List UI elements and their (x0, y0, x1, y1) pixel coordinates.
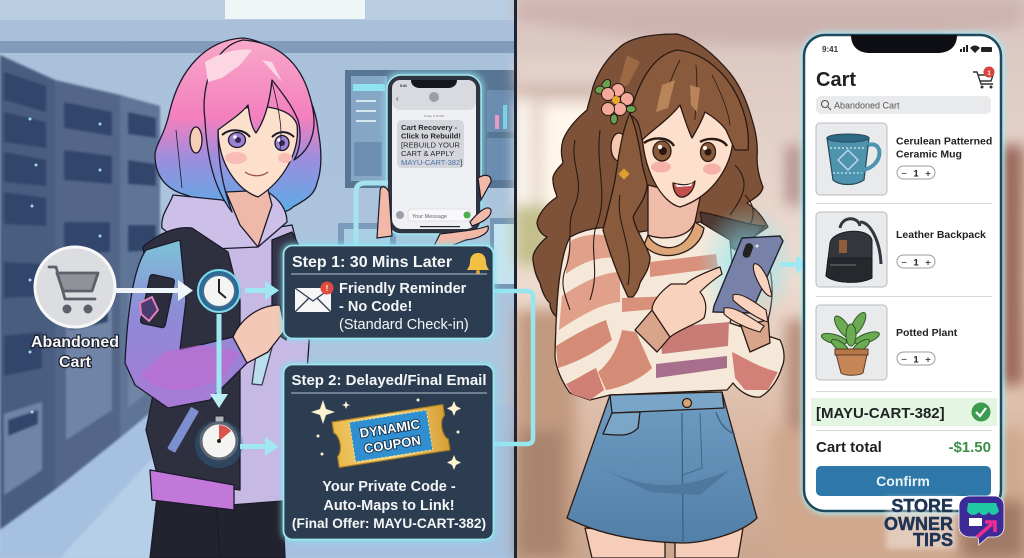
jacket hem (150, 470, 234, 510)
mug label: Ceramic Mug (896, 148, 962, 160)
icon: envelope: ! (326, 284, 328, 293)
right hand (738, 262, 772, 326)
icon: earring (618, 168, 630, 180)
left hand (652, 267, 722, 337)
neck (226, 190, 272, 247)
sparkles (311, 398, 461, 470)
jacket (143, 228, 240, 490)
face (218, 107, 297, 197)
item: backpack (816, 212, 986, 287)
front curl (603, 113, 650, 297)
character: pink-haired girl (125, 38, 321, 558)
item: mug: + (925, 168, 931, 180)
icon: hair flower (595, 78, 636, 124)
search bar (816, 96, 991, 114)
connector: arrow to cart phone (780, 255, 808, 274)
right cuff (740, 317, 770, 352)
item: plant: − (901, 354, 907, 366)
cart total row: Cart total (816, 439, 882, 456)
floor (0, 405, 516, 558)
confirm button (816, 466, 991, 496)
title: Cart (816, 69, 856, 91)
skirt (567, 392, 757, 543)
phone held by pink-haired girl: Today 3:12 PM (424, 114, 445, 118)
item: mug (816, 123, 992, 195)
sms bubble (397, 120, 464, 168)
logo: store owner tips: TIPS (913, 530, 953, 550)
racks (0, 55, 55, 530)
logo icon (959, 496, 1004, 545)
notch (851, 35, 957, 53)
face (642, 105, 733, 207)
item: backpack: − (901, 258, 907, 268)
ear (190, 127, 202, 153)
message input: Your Message (412, 214, 447, 220)
panel: step 1 (281, 243, 496, 341)
neck (648, 185, 700, 238)
sms bubble: CART & APPLY (401, 149, 454, 158)
wall monitors (345, 70, 516, 188)
phone: cart screen (802, 32, 1004, 514)
mouth teeth (675, 182, 693, 187)
arrow: clock to step 1 (245, 281, 279, 300)
step 2 body: (Final Offer: MAYU-CART-382) (292, 516, 486, 531)
label: Abandoned Cart (31, 334, 119, 371)
backpack label: Leather Backpack (896, 229, 986, 241)
character: brown-haired girl (533, 34, 784, 558)
tablet (252, 310, 282, 385)
arrow: stopwatch to step 2 (240, 437, 279, 456)
collar (644, 222, 704, 256)
panel: server room background (0, 0, 516, 558)
label: Abandoned Cart: Abandoned (31, 334, 119, 351)
icon: cart with badge: 1 (987, 71, 991, 77)
icon: clock (197, 269, 241, 313)
icon: cart with badge (973, 66, 994, 88)
step 1 heading: Step 1: 30 Mins Later (292, 254, 452, 271)
step 2 body: Auto-Maps to Link! (323, 498, 455, 514)
sleeve (125, 240, 247, 408)
hair back (533, 34, 768, 317)
logo: store owner tips (884, 496, 1004, 550)
item: mug: 1 (913, 168, 919, 180)
step 1 body: - No Code! (339, 299, 412, 315)
arrow: clock to stopwatch (210, 314, 228, 408)
contact avatar (429, 92, 439, 102)
connector: phone link from step 1 (356, 183, 388, 248)
step 1 body: (Standard Check-in) (339, 317, 469, 333)
legs (585, 528, 665, 558)
coupon code row (811, 398, 997, 426)
item: plant: + (925, 354, 931, 366)
divider between panels (514, 0, 517, 558)
curl lines (563, 130, 630, 310)
icon: abandoned cart circle (35, 247, 115, 327)
icon: envelope (295, 282, 334, 312)
message input (396, 209, 470, 221)
phone held by pink-haired girl: 9:41 (400, 84, 407, 88)
search bar: Abandoned Cart (834, 100, 900, 110)
pants (150, 488, 285, 558)
item: plant (816, 305, 958, 380)
item: backpack: 1 (913, 258, 919, 268)
icon: stopwatch (195, 416, 243, 468)
ear (611, 133, 627, 161)
coupon ticket (332, 405, 450, 467)
confirm button: Confirm (876, 473, 930, 489)
hand (233, 305, 285, 363)
plant label: Potted Plant (896, 327, 958, 339)
hood (162, 192, 287, 250)
phone held by pink-haired girl (377, 72, 491, 247)
mug label: Cerulean Patterned (896, 136, 992, 148)
hoodie body (200, 225, 312, 505)
item: mug: − (901, 168, 907, 180)
sweater (555, 222, 784, 400)
eyes (653, 141, 671, 161)
cart total row: -$1.50 (948, 439, 991, 456)
phone held by pink-haired girl: ‹ (396, 94, 399, 103)
fingers (377, 175, 491, 247)
fingers (724, 264, 772, 332)
step 1 body: Friendly Reminder (339, 281, 467, 297)
status bar: 9:41 (822, 45, 839, 54)
eyes (228, 132, 246, 148)
item: backpack: + (925, 258, 931, 268)
step 2 body: Your Private Code - (322, 479, 456, 495)
backpack quantity (897, 255, 935, 268)
label: Abandoned Cart: Cart (59, 354, 92, 371)
icon: bell (467, 253, 489, 274)
phone held by brown-haired girl (652, 236, 783, 337)
panel: warm room background (516, 0, 1024, 558)
plant quantity (897, 352, 935, 365)
hair back (155, 38, 321, 215)
coupon ticket: DYNAMIC (359, 416, 422, 441)
cart total row (816, 439, 991, 456)
panel: step 2 (281, 362, 496, 542)
bangs (630, 50, 748, 150)
coupon code row: [MAYU-CART-382] (816, 405, 945, 422)
sms bubble: Click to Rebuild! (401, 132, 461, 141)
arrow: cart to clock (114, 280, 193, 301)
item: plant: 1 (913, 354, 919, 366)
sweater stripes (556, 235, 778, 400)
logo: store owner tips: OWNER (884, 514, 953, 534)
sms bubble: [REBUILD YOUR (401, 140, 460, 150)
connector: step boxes to cart (494, 291, 533, 444)
mug quantity (897, 166, 935, 179)
icon: phone glow (698, 203, 798, 327)
sms bubble: Cart Recovery - (401, 123, 458, 132)
arm patch (140, 274, 175, 328)
left cuff (635, 310, 670, 352)
coupon ticket: COUPON (363, 433, 422, 456)
logo: store owner tips: STORE (891, 496, 953, 516)
bangs (204, 40, 314, 212)
sms bubble: MAYU-CART-382] (401, 158, 462, 167)
step 2 heading: Step 2: Delayed/Final Email (291, 372, 487, 389)
